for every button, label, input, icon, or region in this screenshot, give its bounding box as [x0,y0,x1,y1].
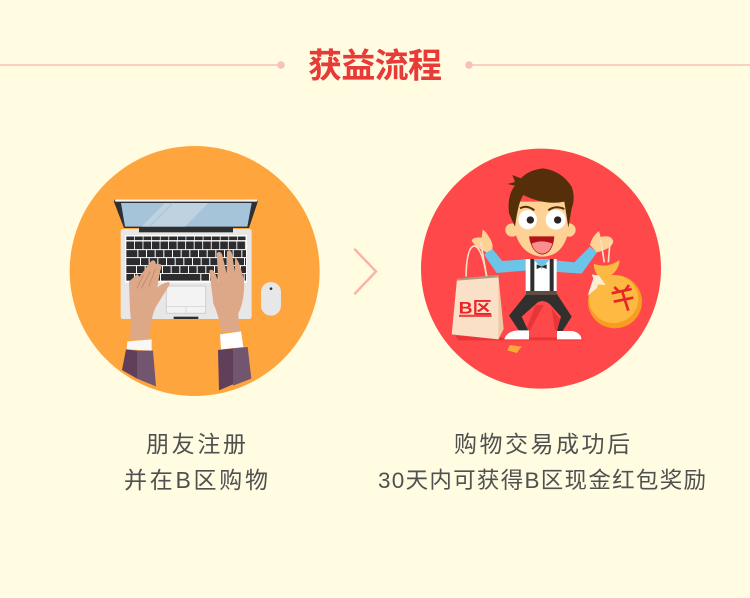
red circle [421,149,661,389]
bag logo: B区 [459,298,492,317]
caption: left step: 并在B区购物 [124,467,268,493]
caption: left step: 朋友注册 [146,431,246,457]
arms [484,246,597,274]
right hand [209,250,244,333]
shoes [504,330,582,339]
head [505,168,576,257]
legs [509,294,572,332]
orange circle [70,146,320,396]
illustration: laptop with typing hands in orange circle [70,146,320,396]
illustration: cheerful man with shopping bag and money bag in red circle [421,149,661,389]
left cuff [127,339,152,351]
laptop base [121,227,252,319]
floor shadow and ticket [455,305,583,353]
money bag [588,240,642,328]
hands [472,230,613,252]
arrow between steps [355,250,376,294]
left sleeve [122,349,156,386]
trackpad [166,286,206,313]
caption: right step: 购物交易成功后 [454,431,630,457]
right sleeve [218,347,251,390]
caption: right step: 30天内可获得B区现金红包奖励 [378,468,706,493]
keyboard keys [126,238,246,277]
caption: left step [124,431,268,493]
shirt and suspenders [526,259,557,295]
right cuff [220,331,243,349]
mouse [261,282,281,316]
shopping bag [452,242,504,339]
title divider: left line [0,61,285,69]
title: 获益流程 [308,48,442,86]
left hand [129,260,170,340]
title divider: right line [465,61,750,69]
caption: right step [378,431,706,493]
laptop screen [114,199,258,228]
